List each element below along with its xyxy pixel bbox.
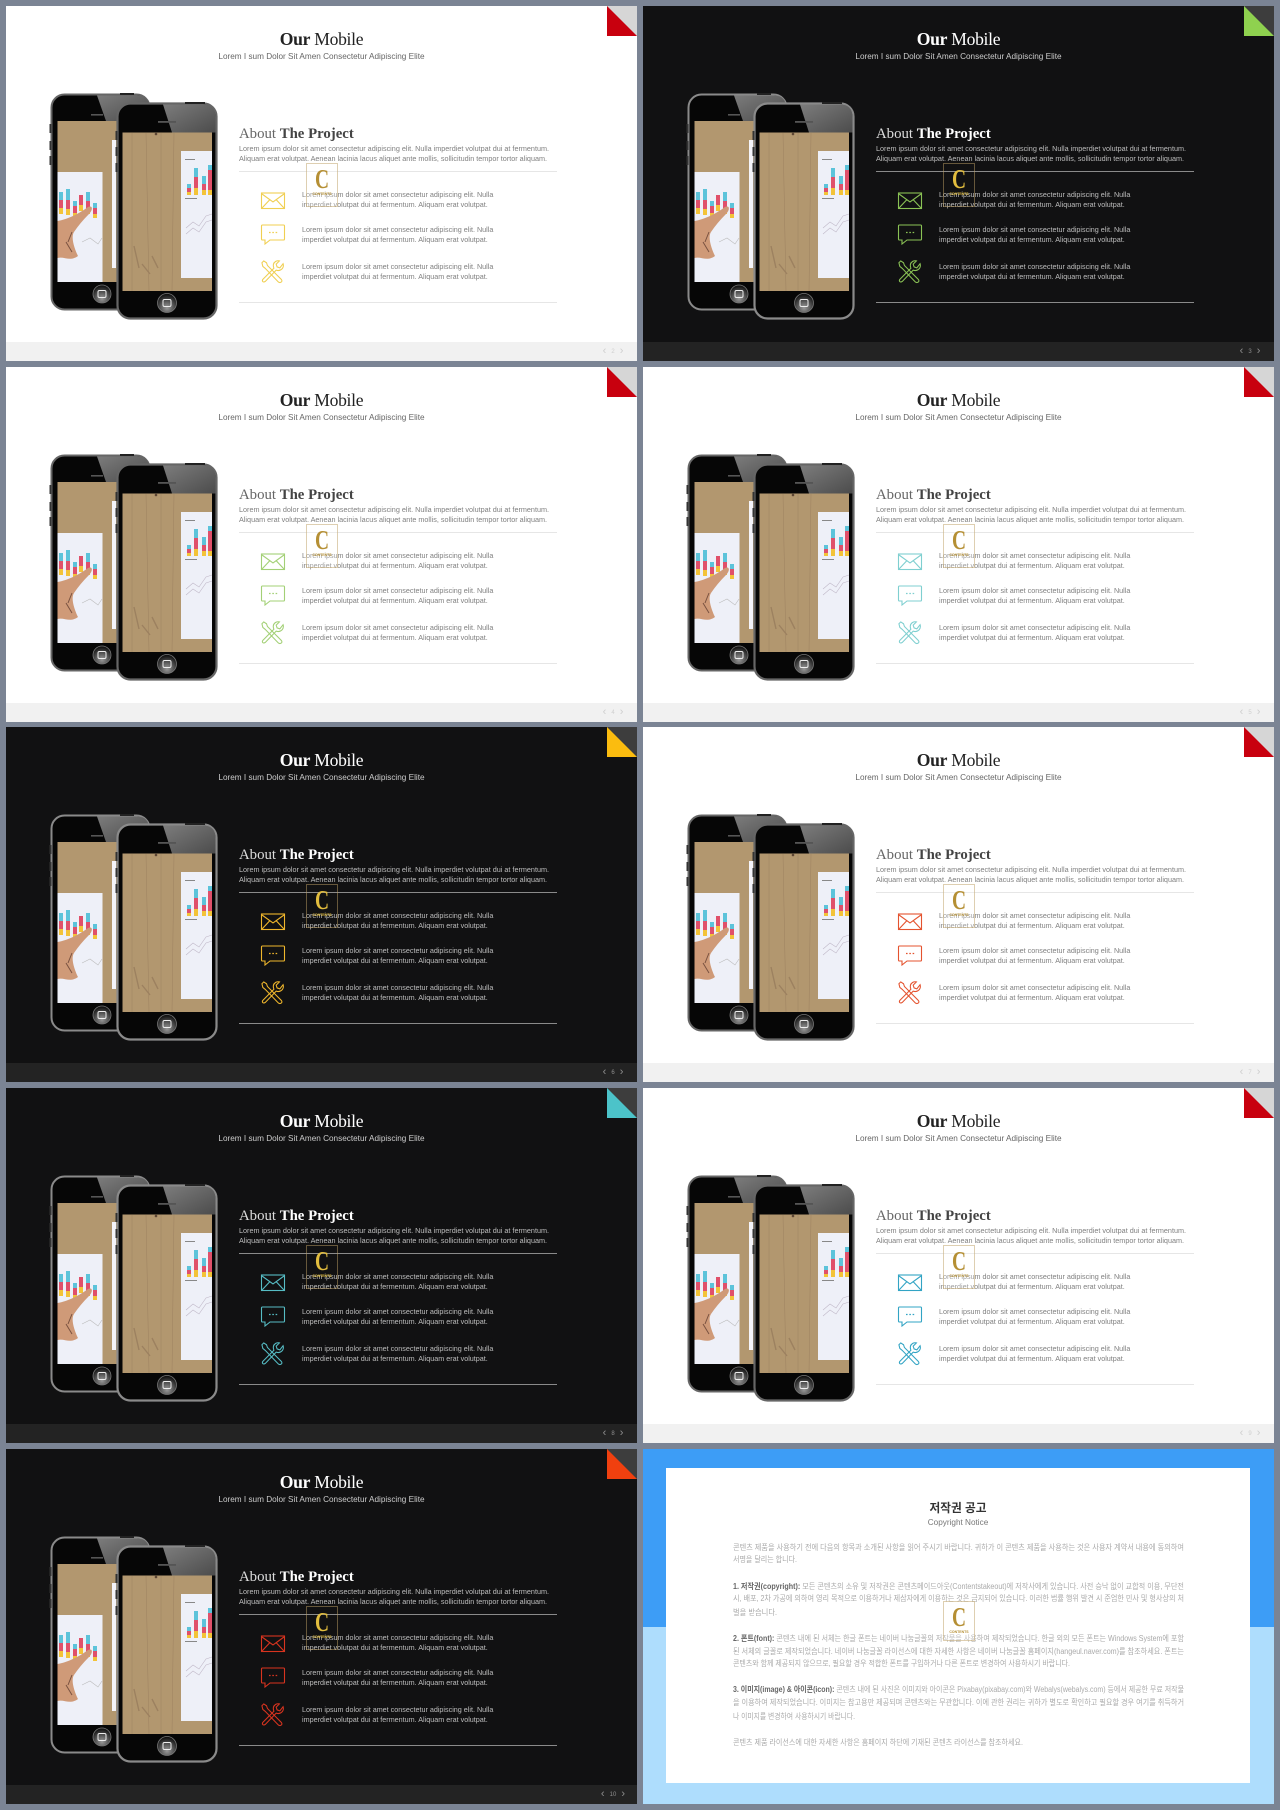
icon: chat bubble	[898, 945, 924, 971]
feature text 3: Lorem ipsum dolor sit amet consectetur adipiscing elit. Nulla	[939, 1344, 1130, 1353]
phone mockups	[6, 727, 637, 1082]
feature text 2: Lorem ipsum dolor sit amet consectetur adipiscing elit. Nulla	[939, 225, 1130, 234]
icon: tools	[261, 981, 287, 1007]
feature text 1: Lorem ipsum dolor sit amet consectetur adipiscing elit. Nulla	[302, 1633, 493, 1642]
corner flag	[1244, 1088, 1274, 1118]
feature text 3	[302, 623, 494, 642]
icon: envelope	[898, 553, 924, 579]
feature text 1: Lorem ipsum dolor sit amet consectetur adipiscing elit. Nulla	[302, 911, 493, 920]
intro paragraph	[876, 144, 1186, 163]
feature text 3: imperdiet volutpat dui at fermentum. Aliquam erat volutpat.	[939, 272, 1125, 281]
section 3: image and icon: 나 이미지를 변경하여 사용하시기 바랍니다.	[733, 1711, 855, 1721]
feature text 1: Lorem ipsum dolor sit amet consectetur adipiscing elit. Nulla	[302, 1272, 493, 1281]
icon: tools	[261, 260, 284, 284]
feature text 2: Lorem ipsum dolor sit amet consectetur adipiscing elit. Nulla	[302, 586, 493, 595]
section 3: image and icon: 을 이용하여 제작되었습니다. 이미지는 참고용만 제공되며 콘텐츠와는 무관합니다. 이에 관한 권리는 귀하가 별도로 확인하고 필요할 경우 여기를 취득하거	[733, 1697, 1184, 1707]
intro paragraph: Lorem ipsum dolor sit amet consectetur adipiscing elit. Nulla imperdiet volutpat dui at fermentum.	[239, 505, 549, 514]
icon: chat bubble	[260, 224, 286, 245]
page number: ‹ 2 ›	[603, 345, 623, 357]
feature text 3	[302, 1344, 493, 1364]
panel: slide 9 white, blue icons	[643, 1088, 1274, 1443]
feature text 1: imperdiet volutpat dui at fermentum. Aliquam erat volutpat.	[939, 1282, 1125, 1291]
feature text 3: imperdiet volutpat dui at fermentum. Aliquam erat volutpat.	[939, 633, 1125, 642]
notice intro	[733, 1542, 1184, 1564]
logo watermark: CONTENTS	[312, 913, 332, 917]
icon: envelope	[898, 913, 924, 939]
feature text 3	[939, 262, 1130, 281]
feature text 1	[939, 190, 1130, 209]
feature text 1	[302, 1272, 493, 1292]
feature text 1: imperdiet volutpat dui at fermentum. Aliquam erat volutpat.	[939, 921, 1125, 930]
slide subtitle: Lorem I sum Dolor Sit Amen Consectetur Adipiscing Elite	[218, 773, 425, 782]
heading: about the project: About The Project	[239, 1569, 354, 1585]
corner flag	[607, 6, 637, 36]
feature text 1: Lorem ipsum dolor sit amet consectetur adipiscing elit. Nulla	[939, 551, 1130, 560]
intro paragraph	[876, 505, 1186, 525]
feature text 1: imperdiet volutpat dui at fermentum. Aliquam erat volutpat.	[302, 1643, 488, 1652]
feature text 2: Lorem ipsum dolor sit amet consectetur adipiscing elit. Nulla	[939, 1307, 1130, 1316]
feature text 2	[302, 1668, 493, 1688]
logo watermark	[306, 524, 338, 568]
intro paragraph: Lorem ipsum dolor sit amet consectetur adipiscing elit. Nulla imperdiet volutpat dui at fermentum.	[239, 1587, 549, 1596]
footer bar	[643, 1424, 1274, 1443]
feature text 3: Lorem ipsum dolor sit amet consectetur adipiscing elit. Nulla	[302, 983, 493, 992]
icon: tools	[261, 1703, 287, 1729]
page number: ‹ 5 ›	[1240, 706, 1260, 718]
feature text 3	[939, 983, 1130, 1003]
panel: slide 6 dark, amber icons	[6, 727, 637, 1082]
notice text	[643, 1449, 1274, 1804]
icon: tools	[898, 1342, 924, 1368]
logo watermark: C	[952, 525, 966, 555]
footer bar	[6, 1063, 637, 1082]
feature text 2: imperdiet volutpat dui at fermentum. Aliquam erat volutpat.	[302, 956, 488, 965]
logo watermark: C	[315, 885, 329, 915]
panel: slide 2 white, yellow icons	[6, 6, 637, 361]
panel: copyright notice slide	[643, 1449, 1274, 1804]
slide title: Our Mobile	[280, 29, 363, 49]
icon: chat bubble	[260, 586, 286, 606]
corner flag	[607, 727, 637, 757]
icon: tools	[898, 981, 924, 1007]
feature text 1	[302, 1633, 493, 1653]
logo watermark	[306, 1245, 338, 1289]
intro paragraph: Aliquam erat volutpat. Aenean lacinia lacus aliquet ante mollis, sollicitudin tempor tortor aliquam.	[876, 1236, 1184, 1245]
section 1: copyright: 벌을 받습니다.	[733, 1607, 777, 1617]
feature text 1	[939, 1272, 1130, 1292]
logo watermark: CONTENTS	[949, 1630, 969, 1634]
phone mockups	[6, 1088, 637, 1443]
phone mockups	[6, 1449, 637, 1804]
logo watermark: CONTENTS	[312, 192, 332, 196]
section 2: font: 콘텐츠와 함께 제공되지 않으므로, 필요할 경우 적합한 폰트를 구입하거나 다른 폰트로 변경하여 사용하시기 바랍니다.	[733, 1658, 1070, 1668]
logo watermark: C	[952, 1602, 966, 1632]
icon: envelope	[260, 192, 286, 210]
feature text 2	[939, 946, 1130, 966]
slide title: Our Mobile	[280, 1111, 363, 1131]
icon: envelope	[898, 1274, 924, 1300]
slide subtitle: Lorem I sum Dolor Sit Amen Consectetur Adipiscing Elite	[218, 1495, 425, 1504]
feature text 3: imperdiet volutpat dui at fermentum. Aliquam erat volutpat.	[939, 993, 1125, 1002]
feature text 3	[939, 623, 1130, 643]
feature text 2: imperdiet volutpat dui at fermentum. Aliquam erat volutpat.	[939, 956, 1125, 965]
slide title: Our Mobile	[917, 750, 1000, 770]
logo watermark: CONTENTS	[312, 1274, 332, 1278]
intro paragraph	[876, 865, 1186, 885]
icon: chat bubble	[261, 1667, 287, 1693]
feature text 2	[302, 1307, 493, 1327]
panel: slide 7 white, red icons	[643, 727, 1274, 1082]
slide title: Our Mobile	[917, 390, 1000, 410]
footer bar	[6, 342, 637, 361]
notice subtitle: Copyright Notice	[928, 1518, 989, 1527]
logo watermark: CONTENTS	[949, 553, 969, 557]
feature text 2	[302, 586, 494, 605]
feature text 2	[939, 586, 1130, 606]
feature text 3: Lorem ipsum dolor sit amet consectetur adipiscing elit. Nulla	[302, 623, 493, 632]
corner flag	[1244, 367, 1274, 397]
heading: about the project: About The Project	[239, 847, 354, 863]
feature text 1: Lorem ipsum dolor sit amet consectetur adipiscing elit. Nulla	[939, 911, 1130, 920]
feature text 3	[302, 262, 494, 281]
logo watermark	[306, 1606, 338, 1650]
page number: ‹ 8 ›	[603, 1427, 623, 1439]
intro paragraph: Lorem ipsum dolor sit amet consectetur adipiscing elit. Nulla imperdiet volutpat dui at fermentum.	[239, 865, 549, 874]
icon: chat bubble	[261, 1306, 287, 1332]
notice intro: 서명을 달리는 합니다.	[733, 1554, 797, 1564]
feature text 3: Lorem ipsum dolor sit amet consectetur adipiscing elit. Nulla	[939, 623, 1130, 632]
page number: ‹ 9 ›	[1240, 1427, 1260, 1439]
intro paragraph: Lorem ipsum dolor sit amet consectetur adipiscing elit. Nulla imperdiet volutpat dui at fermentum.	[876, 1226, 1186, 1235]
slide subtitle: Lorem I sum Dolor Sit Amen Consectetur Adipiscing Elite	[218, 52, 425, 61]
footer bar	[643, 703, 1274, 722]
feature text 1: Lorem ipsum dolor sit amet consectetur adipiscing elit. Nulla	[302, 551, 493, 560]
panel: slide 10 dark, red icons	[6, 1449, 637, 1804]
intro paragraph	[239, 505, 549, 524]
feature text 2: imperdiet volutpat dui at fermentum. Aliquam erat volutpat.	[939, 235, 1125, 244]
phone mockups	[643, 1088, 1274, 1443]
logo watermark: C	[952, 164, 966, 194]
slide subtitle: Lorem I sum Dolor Sit Amen Consectetur Adipiscing Elite	[218, 1134, 425, 1143]
heading: about the project: About The Project	[239, 487, 354, 503]
icon: chat bubble	[898, 1306, 924, 1332]
feature text 3	[302, 1705, 493, 1725]
feature text 1: imperdiet volutpat dui at fermentum. Aliquam erat volutpat.	[302, 1282, 488, 1291]
heading: about the project: About The Project	[876, 1208, 991, 1224]
white notice card	[666, 1468, 1250, 1783]
section 3: image and icon: 3. 이미지(image) & 아이콘(icon): 콘텐츠 내에 된 사진은 이미지와 아이콘은 Pixabay(pixabay.com)와 Webalys(webalys.com) 등에서 제공한 무료 저작물	[733, 1684, 1184, 1694]
feature text 1: imperdiet volutpat dui at fermentum. Aliquam erat volutpat.	[939, 561, 1125, 570]
icon: tools	[261, 621, 284, 644]
intro paragraph: Aliquam erat volutpat. Aenean lacinia lacus aliquet ante mollis, sollicitudin tempor tortor aliquam.	[876, 515, 1184, 524]
feature text 2: imperdiet volutpat dui at fermentum. Aliquam erat volutpat.	[302, 596, 488, 605]
feature text 2: Lorem ipsum dolor sit amet consectetur adipiscing elit. Nulla	[302, 946, 493, 955]
icon: envelope	[261, 1635, 287, 1661]
feature text 3: Lorem ipsum dolor sit amet consectetur adipiscing elit. Nulla	[302, 1705, 493, 1714]
footer bar	[643, 1063, 1274, 1082]
logo watermark	[943, 524, 975, 568]
slide subtitle: Lorem I sum Dolor Sit Amen Consectetur Adipiscing Elite	[855, 773, 1062, 782]
icon: chat bubble	[898, 224, 922, 245]
page number: ‹ 10 ›	[601, 1788, 625, 1800]
footer bar	[6, 703, 637, 722]
section 1: copyright	[733, 1581, 1184, 1617]
feature text 1: Lorem ipsum dolor sit amet consectetur adipiscing elit. Nulla	[939, 1272, 1130, 1281]
intro paragraph: Lorem ipsum dolor sit amet consectetur adipiscing elit. Nulla imperdiet volutpat dui at fermentum.	[239, 144, 549, 153]
heading: about the project: About The Project	[239, 126, 354, 142]
feature text 3: imperdiet volutpat dui at fermentum. Aliquam erat volutpat.	[302, 1715, 488, 1724]
feature text 2: Lorem ipsum dolor sit amet consectetur adipiscing elit. Nulla	[939, 586, 1130, 595]
corner flag	[607, 1449, 637, 1479]
notice intro: 콘텐츠 제품을 사용하기 전에 다음의 항목과 소개된 사항을 읽어 주시기 바랍니다. 귀하가 이 콘텐츠 제품을 사용하는 것은 사용자 계약서 내용에 동의하여	[733, 1542, 1184, 1552]
feature text 2	[939, 225, 1130, 244]
logo watermark: C	[315, 525, 329, 555]
feature text 3: imperdiet volutpat dui at fermentum. Aliquam erat volutpat.	[302, 272, 488, 281]
panel: slide 3 dark, green icons	[643, 6, 1274, 361]
feature text 2: Lorem ipsum dolor sit amet consectetur adipiscing elit. Nulla	[302, 1668, 493, 1677]
phone mockups	[50, 93, 218, 320]
logo watermark: C	[952, 885, 966, 915]
feature text 2: imperdiet volutpat dui at fermentum. Aliquam erat volutpat.	[302, 235, 488, 244]
slide title: Our Mobile	[280, 1472, 363, 1492]
section 3: image and icon	[733, 1684, 1184, 1721]
section 1: copyright: 1. 저작권(copyright): 모든 콘텐츠의 소유 및 저작권은 콘텐츠메이드아웃(Contentstakeout)에 저작사에게 있습니다. 사전 승낙 없이 교합적 이용, 무단전	[733, 1581, 1184, 1591]
phone mockups	[50, 454, 218, 681]
intro paragraph	[239, 1226, 549, 1246]
intro paragraph: Aliquam erat volutpat. Aenean lacinia lacus aliquet ante mollis, sollicitudin tempor tortor aliquam.	[876, 154, 1184, 163]
heading: about the project: About The Project	[239, 1208, 354, 1224]
feature text 3: imperdiet volutpat dui at fermentum. Aliquam erat volutpat.	[302, 993, 488, 1002]
closing line: 콘텐츠 제품 라이선스에 대한 자세한 사항은 홈페이지 하단에 기재된 콘텐츠 라이선스를 참조하세요.	[733, 1737, 1023, 1747]
logo watermark	[943, 1601, 975, 1641]
intro paragraph	[239, 1587, 549, 1607]
logo watermark: C	[952, 1246, 966, 1276]
feature text 2: Lorem ipsum dolor sit amet consectetur adipiscing elit. Nulla	[939, 946, 1130, 955]
slide subtitle: Lorem I sum Dolor Sit Amen Consectetur Adipiscing Elite	[855, 1134, 1062, 1143]
logo watermark	[943, 1245, 975, 1289]
page number: ‹ 6 ›	[603, 1066, 623, 1078]
section 2: font	[733, 1633, 1185, 1668]
feature text 2: imperdiet volutpat dui at fermentum. Aliquam erat volutpat.	[939, 1317, 1125, 1326]
intro paragraph: Aliquam erat volutpat. Aenean lacinia lacus aliquet ante mollis, sollicitudin tempor tortor aliquam.	[239, 1236, 547, 1245]
heading: about the project: About The Project	[876, 126, 991, 142]
intro paragraph: Lorem ipsum dolor sit amet consectetur adipiscing elit. Nulla imperdiet volutpat dui at fermentum.	[876, 505, 1186, 514]
feature text 3: imperdiet volutpat dui at fermentum. Aliquam erat volutpat.	[939, 1354, 1125, 1363]
icon: envelope	[898, 192, 922, 210]
corner flag	[1244, 6, 1274, 36]
feature text 2: imperdiet volutpat dui at fermentum. Aliquam erat volutpat.	[302, 1317, 488, 1326]
intro paragraph: Aliquam erat volutpat. Aenean lacinia lacus aliquet ante mollis, sollicitudin tempor tortor aliquam.	[239, 875, 547, 884]
logo watermark	[943, 163, 975, 207]
slide title: Our Mobile	[917, 29, 1000, 49]
phone mockups	[686, 93, 855, 320]
phone mockups	[686, 454, 855, 681]
icon: envelope	[261, 1274, 287, 1300]
section 1: copyright: 시, 배포, 2차 가공에 의하여 영리 목적으로 이용하거나 제삼자에게 이용하는 것은 금지되어 있습니다. 이러한 법률 행위 발견 시 준엄한 민사 및 형사상의 처	[733, 1593, 1184, 1603]
footer bar	[6, 1424, 637, 1443]
icon: tools	[261, 1342, 287, 1368]
feature text 1: imperdiet volutpat dui at fermentum. Aliquam erat volutpat.	[302, 200, 488, 209]
slide title: Our Mobile	[280, 390, 363, 410]
feature text 2	[302, 225, 494, 244]
feature text 3: Lorem ipsum dolor sit amet consectetur adipiscing elit. Nulla	[302, 1344, 493, 1353]
logo watermark	[943, 884, 975, 928]
logo watermark	[306, 163, 338, 207]
page number: ‹ 4 ›	[603, 706, 623, 718]
feature text 2: Lorem ipsum dolor sit amet consectetur adipiscing elit. Nulla	[302, 1307, 493, 1316]
icon: chat bubble	[898, 585, 924, 611]
icon: tools	[898, 260, 921, 284]
footer bar	[6, 1785, 637, 1804]
corner flag	[1244, 727, 1274, 757]
corner flag	[607, 1088, 637, 1118]
intro paragraph: Aliquam erat volutpat. Aenean lacinia lacus aliquet ante mollis, sollicitudin tempor tortor aliquam.	[239, 515, 547, 524]
feature text 3: Lorem ipsum dolor sit amet consectetur adipiscing elit. Nulla	[939, 983, 1130, 992]
feature text 1: imperdiet volutpat dui at fermentum. Aliquam erat volutpat.	[939, 200, 1125, 209]
feature text 1	[939, 911, 1130, 931]
panel: slide 8 dark, teal icons	[6, 1088, 637, 1443]
section 2: font: 2. 폰트(font): 콘텐츠 내에 된 서체는 한글 폰트는 네이버 나눔글꼴의 저작물을 사용하여 제작되었습니다. 한글 외의 모든 폰트는 Windows System에 포함	[733, 1633, 1185, 1643]
intro paragraph: Lorem ipsum dolor sit amet consectetur adipiscing elit. Nulla imperdiet volutpat dui at fermentum.	[876, 865, 1186, 874]
logo watermark: C	[315, 164, 329, 194]
footer bar	[643, 342, 1274, 361]
intro paragraph: Aliquam erat volutpat. Aenean lacinia lacus aliquet ante mollis, sollicitudin tempor tortor aliquam.	[876, 875, 1184, 884]
feature text 3	[302, 983, 493, 1003]
feature text 2: Lorem ipsum dolor sit amet consectetur adipiscing elit. Nulla	[302, 225, 493, 234]
slide subtitle: Lorem I sum Dolor Sit Amen Consectetur Adipiscing Elite	[855, 413, 1062, 422]
feature text 1: Lorem ipsum dolor sit amet consectetur adipiscing elit. Nulla	[302, 190, 493, 199]
logo watermark: CONTENTS	[312, 1635, 332, 1639]
icon: chat bubble	[261, 945, 287, 971]
feature text 2	[302, 946, 493, 966]
notice title: 저작권 공고	[929, 1501, 987, 1515]
icon: envelope	[261, 913, 287, 939]
feature text 1	[939, 551, 1130, 571]
logo watermark: CONTENTS	[949, 913, 969, 917]
slide subtitle: Lorem I sum Dolor Sit Amen Consectetur Adipiscing Elite	[218, 413, 425, 422]
feature text 1	[302, 190, 494, 209]
intro paragraph	[876, 1226, 1186, 1246]
intro paragraph: Lorem ipsum dolor sit amet consectetur adipiscing elit. Nulla imperdiet volutpat dui at fermentum.	[876, 144, 1186, 153]
page number: ‹ 7 ›	[1240, 1066, 1260, 1078]
feature text 1	[302, 551, 494, 570]
feature text 1: imperdiet volutpat dui at fermentum. Aliquam erat volutpat.	[302, 561, 488, 570]
feature text 2: imperdiet volutpat dui at fermentum. Aliquam erat volutpat.	[302, 1678, 488, 1687]
feature text 2	[939, 1307, 1130, 1327]
icon: envelope	[260, 553, 286, 570]
logo watermark	[306, 884, 338, 928]
corner flag	[607, 367, 637, 397]
heading: about the project: About The Project	[876, 487, 991, 503]
feature text 3: imperdiet volutpat dui at fermentum. Aliquam erat volutpat.	[302, 1354, 488, 1363]
feature text 3: imperdiet volutpat dui at fermentum. Aliquam erat volutpat.	[302, 633, 488, 642]
slide title: Our Mobile	[280, 750, 363, 770]
phone mockups	[643, 727, 1274, 1082]
logo watermark: CONTENTS	[949, 1274, 969, 1278]
intro paragraph: Lorem ipsum dolor sit amet consectetur adipiscing elit. Nulla imperdiet volutpat dui at fermentum.	[239, 1226, 549, 1235]
panel: slide 4 white, green icons	[6, 367, 637, 722]
logo watermark: C	[315, 1246, 329, 1276]
feature text 3	[939, 1344, 1130, 1364]
logo watermark: CONTENTS	[949, 192, 969, 196]
intro paragraph	[239, 144, 549, 163]
intro paragraph	[239, 865, 549, 885]
panel: slide 5 white, teal icons	[643, 367, 1274, 722]
section 2: font: 된 서체의 글꼴로 제작되었습니다. 네이버 나눔글꼴 라이선스에 대한 자세한 사항은 네이버 나눔글꼴 홈페이지(hangeul.naver.com)를 참조하세요. 폰트는	[733, 1646, 1184, 1656]
intro paragraph: Aliquam erat volutpat. Aenean lacinia lacus aliquet ante mollis, sollicitudin tempor tortor aliquam.	[239, 1597, 547, 1606]
logo watermark: C	[315, 1607, 329, 1637]
heading: about the project: About The Project	[876, 847, 991, 863]
intro paragraph: Aliquam erat volutpat. Aenean lacinia lacus aliquet ante mollis, sollicitudin tempor tortor aliquam.	[239, 154, 547, 163]
slide subtitle: Lorem I sum Dolor Sit Amen Consectetur Adipiscing Elite	[855, 52, 1062, 61]
feature text 1	[302, 911, 493, 931]
icon: tools	[898, 621, 924, 647]
slide title: Our Mobile	[917, 1111, 1000, 1131]
logo watermark: CONTENTS	[312, 553, 332, 557]
feature text 1: Lorem ipsum dolor sit amet consectetur adipiscing elit. Nulla	[939, 190, 1130, 199]
feature text 3: Lorem ipsum dolor sit amet consectetur adipiscing elit. Nulla	[939, 262, 1130, 271]
feature text 3: Lorem ipsum dolor sit amet consectetur adipiscing elit. Nulla	[302, 262, 493, 271]
feature text 1: imperdiet volutpat dui at fermentum. Aliquam erat volutpat.	[302, 921, 488, 930]
page number: ‹ 3 ›	[1240, 345, 1260, 357]
feature text 2: imperdiet volutpat dui at fermentum. Aliquam erat volutpat.	[939, 596, 1125, 605]
